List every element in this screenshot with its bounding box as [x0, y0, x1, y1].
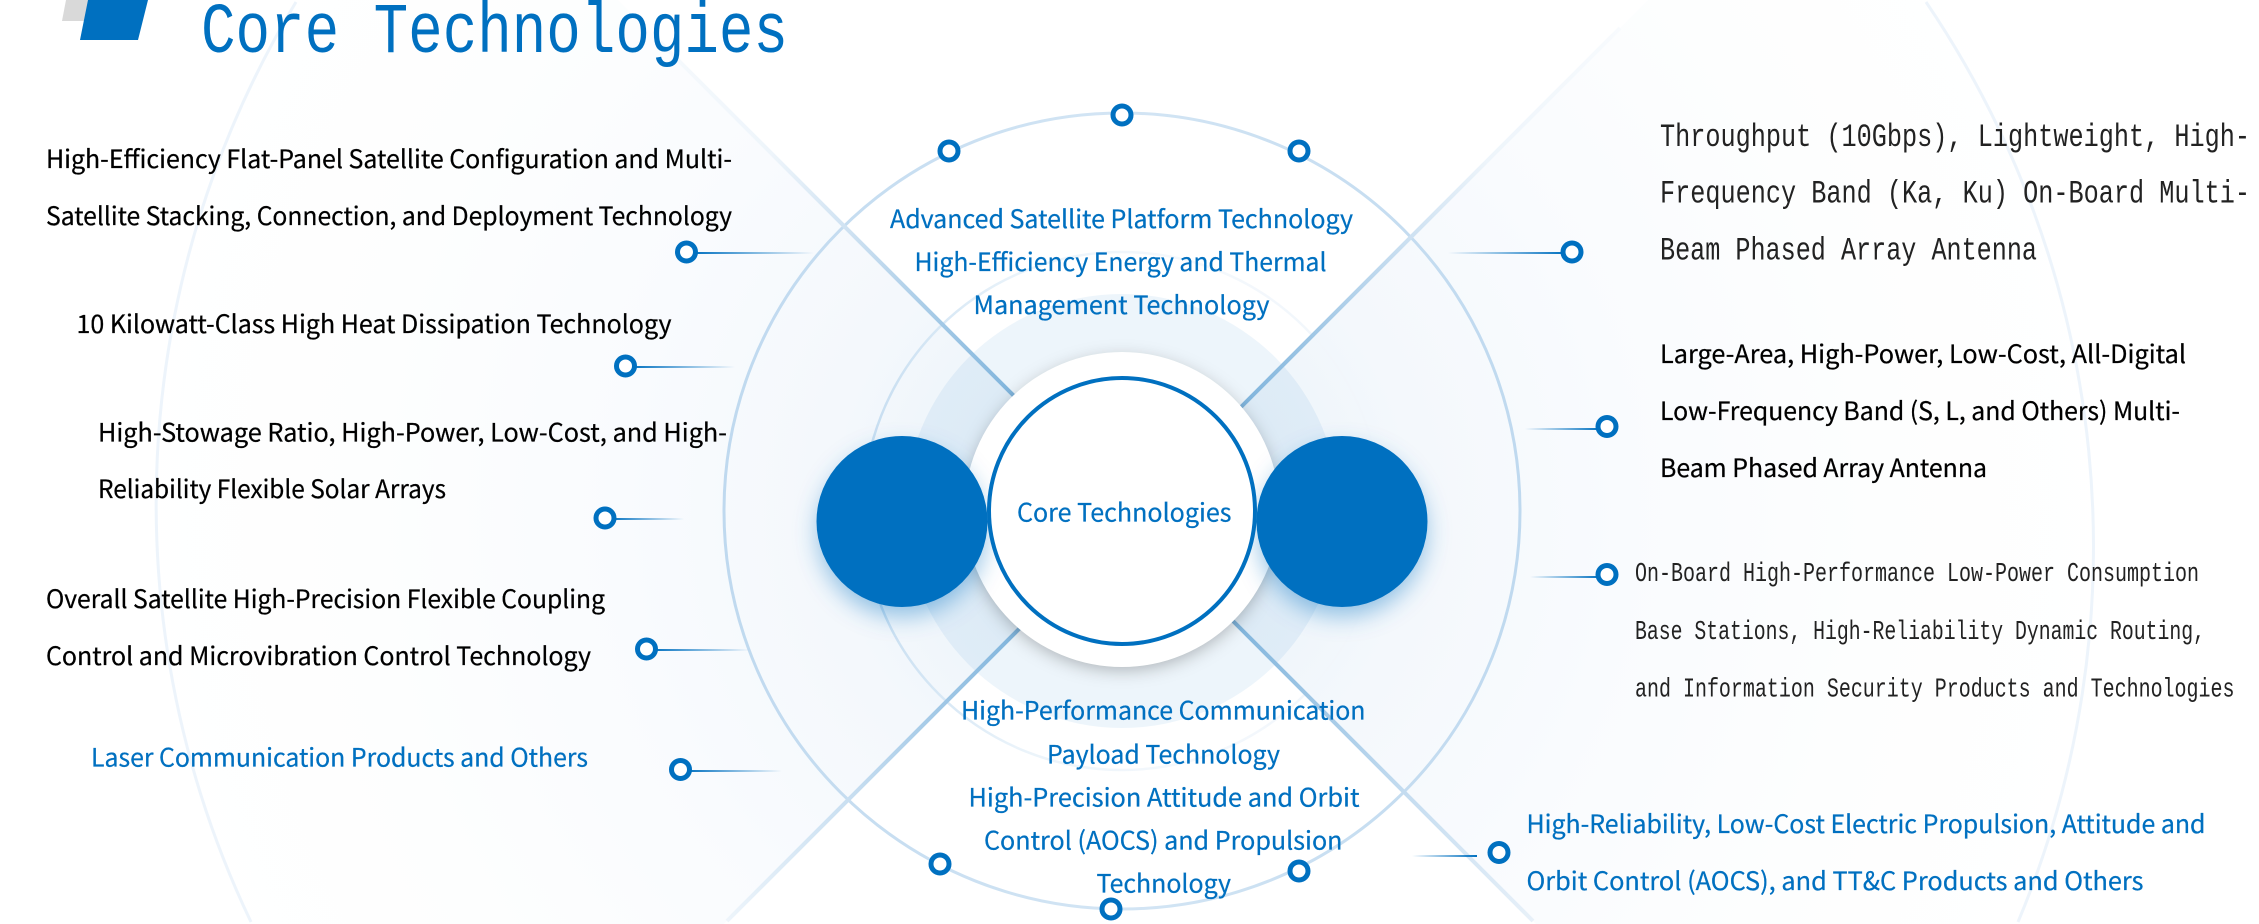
center top text: High-Efficiency Energy and Thermal	[914, 243, 1326, 279]
left item 4: Control and Microvibration Control Technology	[46, 637, 591, 673]
left item 1: Satellite Stacking, Connection, and Deployment Technology	[46, 197, 732, 233]
hub label: Core Technologies	[1017, 494, 1232, 530]
right item 2: Beam Phased Array Antenna	[1660, 449, 1987, 485]
center top text	[890, 200, 1353, 322]
left item 2: 10 Kilowatt-Class High Heat Dissipation Technology	[76, 305, 672, 341]
center bottom text: High-Precision Attitude and Orbit	[968, 778, 1360, 814]
ring markers	[931, 106, 1308, 918]
right item 2: Large-Area, High-Power, Low-Cost, All-Digital	[1660, 335, 2186, 371]
center bottom text: Technology	[1096, 864, 1231, 900]
center bottom text: Payload Technology	[1047, 736, 1280, 772]
right item 4	[1412, 805, 2206, 898]
left item 3	[98, 414, 727, 527]
right item 2	[1525, 335, 2186, 485]
center bottom text: High-Performance Communication	[961, 692, 1366, 728]
left item 5: Laser Communication Products and Others	[91, 738, 588, 774]
left item 4: Overall Satellite High-Precision Flexible Coupling	[46, 580, 605, 616]
center top text: Advanced Satellite Platform Technology	[890, 200, 1353, 236]
central hub	[816, 352, 1428, 669]
right item 3	[1530, 560, 2234, 706]
left item 1	[46, 140, 814, 261]
left item 1: High-Efficiency Flat-Panel Satellite Configuration and Multi-	[46, 140, 732, 176]
center bottom text	[961, 692, 1366, 900]
left item 2	[76, 305, 735, 375]
left item 5	[91, 738, 782, 778]
right item 1	[1448, 119, 2250, 270]
right item 1: Beam Phased Array Antenna	[1660, 232, 2037, 270]
left item 3: High-Stowage Ratio, High-Power, Low-Cost, and High-	[98, 414, 727, 450]
left item 3: Reliability Flexible Solar Arrays	[98, 470, 446, 506]
right item 4: High-Reliability, Low-Cost Electric Propulsion, Attitude and	[1526, 805, 2206, 841]
diagonal divider lines	[660, 28, 1620, 921]
title icon	[62, 0, 148, 40]
concentric rings	[724, 113, 1520, 909]
left item 4	[46, 580, 750, 673]
right item 4: Orbit Control (AOCS), and TT&C Products and Others	[1526, 862, 2144, 898]
center bottom text: Control (AOCS) and Propulsion	[984, 822, 1342, 858]
center top text: Management Technology	[974, 286, 1270, 322]
right item 2: Low-Frequency Band (S, L, and Others) Multi-	[1660, 392, 2180, 428]
